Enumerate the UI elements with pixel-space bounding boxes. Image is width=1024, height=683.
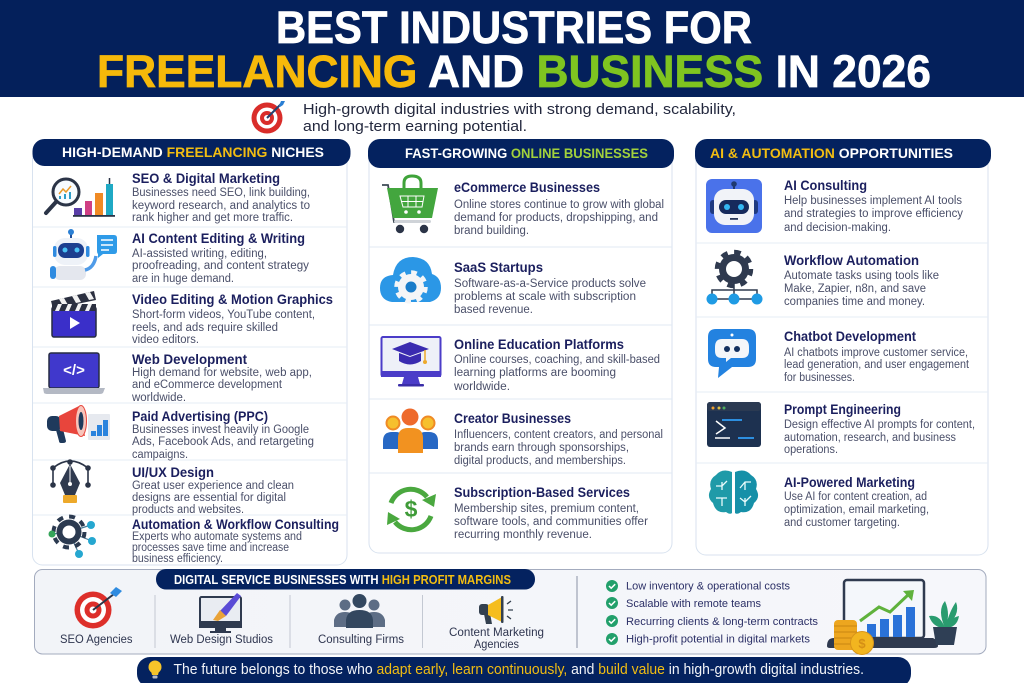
- item title: Video Editing & Motion Graphics: [132, 292, 333, 307]
- icon: group of people: [334, 594, 385, 628]
- item title: Online Education Platforms: [454, 337, 624, 352]
- item description: Online stores continue to grow with global: [454, 199, 664, 211]
- icon: cloud with gear: [380, 257, 441, 302]
- item title: AI Consulting: [784, 178, 867, 193]
- icon: laptop with code: [43, 353, 105, 394]
- item title: Creator Businesses: [454, 411, 571, 426]
- panel: digital service businesses: [34, 569, 986, 654]
- item description: lead generation, and user engagement: [784, 359, 970, 371]
- item description: [131, 367, 312, 404]
- item description: [453, 354, 660, 393]
- item description: Influencers, content creators, and personal: [454, 429, 663, 441]
- heading pill: HIGH-DEMAND FREELANCING NICHES: [62, 144, 324, 160]
- item description: and decision-making.: [784, 222, 891, 234]
- item description: Use AI for content creation, ad: [784, 491, 927, 503]
- item description: proofreading, and content strategy: [132, 260, 309, 272]
- item: Automation & Workflow Consulting: [48, 516, 339, 565]
- item description: products and websites.: [132, 504, 244, 516]
- item description: [454, 199, 664, 237]
- item description: worldwide.: [453, 381, 510, 393]
- item description: [784, 270, 939, 308]
- icon: shopping cart: [382, 176, 438, 233]
- item description: [454, 429, 663, 467]
- item: AI Consulting: [706, 178, 963, 234]
- item description: [132, 424, 314, 461]
- illustration: laptop with growth chart, coins and plant: [827, 580, 959, 654]
- icon: megaphone and chart: [47, 406, 110, 443]
- icon: subtitle target: [252, 101, 285, 134]
- label: Agencies: [474, 639, 519, 651]
- item description: and customer targeting.: [784, 517, 900, 529]
- service: Web Design Studios: [170, 593, 273, 646]
- item description: [132, 480, 294, 516]
- icon: pen tool: [50, 459, 91, 503]
- item description: Membership sites, premium content,: [454, 503, 639, 515]
- item: Creator Businesses: [383, 408, 663, 467]
- item description: Automate tasks using tools like: [784, 270, 939, 282]
- item description: for businesses.: [784, 372, 855, 384]
- item description: video editors.: [132, 334, 199, 346]
- title line 1: BEST INDUSTRIES FOR: [276, 2, 752, 53]
- item: UI/UX Design: [50, 459, 294, 516]
- item description: [784, 347, 970, 384]
- item description: [132, 531, 302, 565]
- icon: group of creators: [383, 408, 438, 453]
- heading pill: [32, 139, 350, 166]
- item description: are in huge demand.: [132, 273, 234, 285]
- item description: software tools, and communities offer: [454, 516, 648, 528]
- item title: Automation & Workflow Consulting: [132, 517, 339, 532]
- subtitle: High-growth digital industries with strong demand, scalability,: [303, 102, 736, 118]
- heading pill: FAST-GROWING ONLINE BUSINESSES: [405, 145, 648, 161]
- icon: megaphone: [479, 596, 513, 624]
- item description: [784, 491, 929, 529]
- item: Paid Advertising: [47, 406, 314, 461]
- item description: processes save time and increase: [132, 542, 289, 554]
- item title: SEO & Digital Marketing: [132, 171, 280, 186]
- label: Content Marketing: [449, 627, 544, 639]
- item title: Web Development: [132, 352, 247, 367]
- icon: magnifier and bars: [46, 178, 115, 217]
- panel: AI and automation opportunities: [695, 139, 991, 555]
- heading pill: [368, 139, 674, 168]
- header banner: [0, 0, 1024, 97]
- item description: Great user experience and clean: [132, 480, 294, 492]
- item description: [132, 309, 315, 346]
- item description: campaigns.: [132, 449, 188, 461]
- service: Content Marketing Agencies: [449, 596, 544, 651]
- heading pill: [156, 569, 535, 590]
- item description: Make, Zapier, n8n, and save: [784, 283, 926, 295]
- item title: eCommerce Businesses: [454, 180, 600, 195]
- item description: Help businesses implement AI tools: [784, 195, 962, 207]
- icon: terminal window: [707, 402, 761, 447]
- item description: [132, 248, 309, 285]
- item: Video Editing & Motion Graphics: [51, 291, 333, 346]
- icon: robot tile: [706, 179, 762, 233]
- check 3: Recurring clients & long-term contracts: [626, 616, 819, 628]
- item description: [784, 419, 975, 456]
- item: Online Education Platforms: [381, 337, 660, 393]
- item title: Subscription-Based Services: [454, 485, 630, 500]
- item description: brand building.: [454, 225, 529, 237]
- icon: recurring dollar: $: [405, 496, 418, 522]
- item description: keyword research, and analytics to: [132, 200, 310, 212]
- item description: AI-assisted writing, editing,: [132, 248, 267, 260]
- icon: laptop with code: </>: [63, 362, 85, 379]
- item title: Workflow Automation: [784, 253, 919, 268]
- check 4: High-profit potential in digital markets: [626, 634, 810, 646]
- item: Subscription-Based Services: [387, 485, 648, 541]
- item title: SaaS Startups: [454, 260, 543, 275]
- footer message: The future belongs to those who adapt early, learn continuously, and build value in high-growth digital industries.: [174, 662, 864, 678]
- label: Consulting Firms: [318, 634, 404, 646]
- item description: AI chatbots improve customer service,: [784, 347, 968, 359]
- item description: demand for products, dropshipping, and: [454, 212, 658, 224]
- title line 2: FREELANCING AND BUSINESS IN 2026: [97, 46, 931, 97]
- item: Chatbot Development: [708, 329, 970, 384]
- item: Web Development: [43, 352, 312, 404]
- label: [449, 627, 544, 651]
- item description: learning platforms are booming: [454, 367, 616, 379]
- item description: [132, 187, 310, 224]
- illustration: laptop with growth chart, coins and plant: $: [858, 636, 866, 651]
- item description: reels, and ads require skilled: [132, 322, 278, 334]
- item title: Prompt Engineering: [784, 402, 901, 417]
- item title: UI/UX Design: [132, 465, 214, 480]
- panel: high-demand freelancing niches: [32, 139, 350, 565]
- service: SEO Agencies: [60, 587, 133, 646]
- heading pill: [695, 139, 991, 168]
- item description: companies time and money.: [784, 296, 925, 308]
- icon: clapperboard: [51, 291, 96, 337]
- item description: automation, research, and business: [784, 432, 956, 444]
- item description: problems at scale with subscription: [454, 291, 636, 303]
- panel: fast-growing online businesses: [368, 139, 674, 553]
- item: AI-Powered Marketing: [709, 471, 929, 529]
- item description: based revenue.: [454, 304, 533, 316]
- item description: digital products, and memberships.: [454, 455, 626, 467]
- item description: brands earn through sponsorships,: [454, 442, 629, 454]
- item title: AI-Powered Marketing: [784, 475, 915, 490]
- benefits checklist: [606, 580, 819, 646]
- item description: Short-form videos, YouTube content,: [132, 309, 315, 321]
- item: SaaS Startups: [380, 257, 646, 316]
- item description: Businesses need SEO, link building,: [132, 187, 310, 199]
- heading pill: DIGITAL SERVICE BUSINESSES WITH HIGH PROFIT MARGINS: [174, 573, 511, 587]
- item: eCommerce Businesses: [382, 176, 664, 237]
- label: SEO Agencies: [60, 634, 133, 646]
- item description: Experts who automate systems and: [132, 531, 302, 543]
- item: SEO & Digital Marketing: [46, 171, 310, 224]
- icon: circuit brain: [709, 471, 758, 514]
- subtitle: [303, 102, 736, 135]
- item description: optimization, email marketing,: [784, 504, 929, 516]
- icon: target with arrow: [74, 587, 122, 628]
- item: AI Content Editing & Writing: [50, 229, 309, 285]
- icon: gear with nodes: [48, 516, 96, 558]
- subtitle: and long-term earning potential.: [303, 119, 527, 135]
- check 2: Scalable with remote teams: [626, 598, 761, 610]
- item description: and strategies to improve efficiency: [784, 208, 963, 220]
- check 1: Low inventory & operational costs: [626, 580, 790, 592]
- service: Consulting Firms: [318, 594, 404, 646]
- item: Workflow Automation: [706, 252, 939, 308]
- item description: High demand for website, web app,: [132, 367, 312, 379]
- item description: [454, 278, 646, 316]
- icon: robot with speech bubble: [50, 229, 117, 280]
- item description: worldwide.: [131, 392, 186, 404]
- icon: monitor and brush: [199, 593, 242, 633]
- item description: Businesses invest heavily in Google: [132, 424, 309, 436]
- item description: and eCommerce development: [132, 379, 283, 391]
- icon: light bulb: [148, 660, 162, 678]
- item description: recurring monthly revenue.: [454, 529, 592, 541]
- item title: AI Content Editing & Writing: [132, 231, 305, 246]
- icon: monitor with graduation cap: [381, 337, 441, 386]
- item description: Software-as-a-Service products solve: [454, 278, 646, 290]
- item description: Ads, Facebook Ads, and retargeting: [132, 436, 314, 448]
- item description: Design effective AI prompts for content,: [784, 419, 975, 431]
- item description: operations.: [784, 444, 838, 456]
- item description: rank higher and get more traffic.: [132, 212, 293, 224]
- icon: chat bubble robot: [708, 329, 756, 378]
- item description: [784, 195, 963, 234]
- heading pill: AI & AUTOMATION OPPORTUNITIES: [710, 145, 953, 161]
- item description: Online courses, coaching, and skill-based: [454, 354, 660, 366]
- label: Web Design Studios: [170, 634, 273, 646]
- footer banner: [137, 657, 911, 683]
- icon: recurring dollar: [387, 489, 436, 530]
- icon: gear and network: [706, 252, 762, 304]
- item description: designs are essential for digital: [132, 492, 286, 504]
- item description: business efficiency.: [132, 553, 223, 565]
- item: Prompt Engineering: [707, 402, 975, 456]
- item title: Paid Advertising (PPC): [132, 409, 268, 424]
- item title: Chatbot Development: [784, 329, 916, 344]
- item description: [454, 503, 648, 541]
